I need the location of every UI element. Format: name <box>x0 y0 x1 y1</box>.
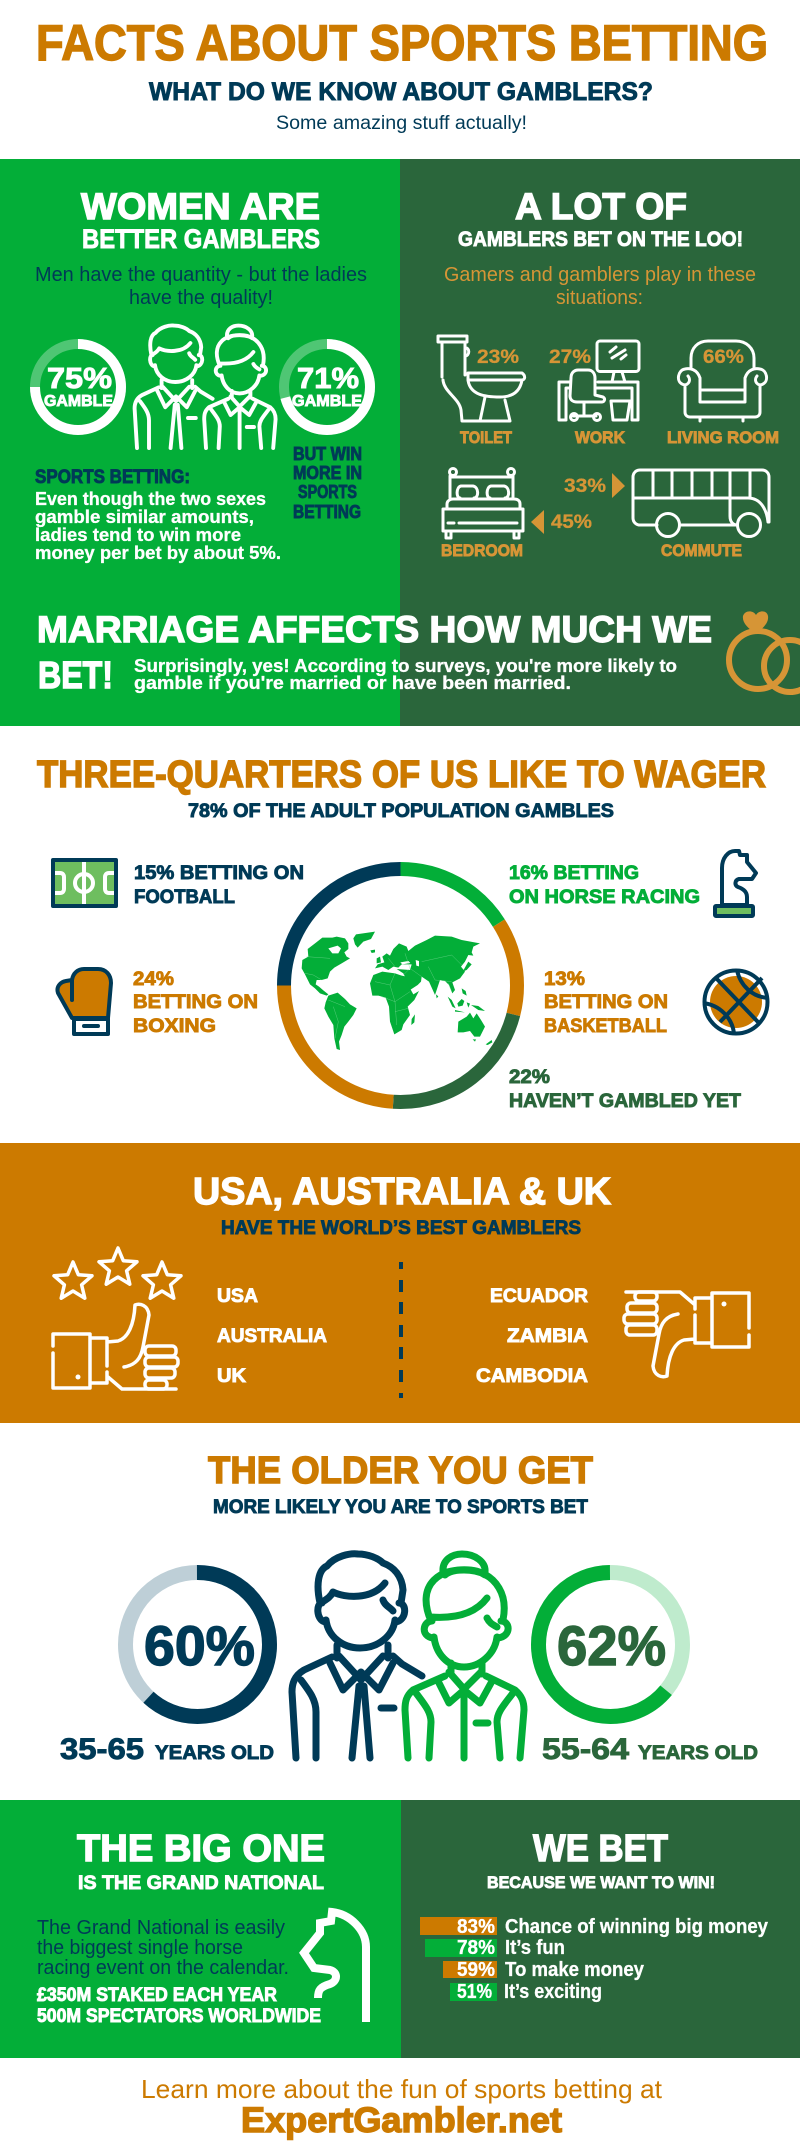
panel: the big one background <box>0 1800 401 2058</box>
icon: bed <box>443 468 523 538</box>
stat: basketball: BETTING ON <box>544 991 668 1013</box>
stat: basketball: BASKETBALL <box>544 1015 667 1037</box>
text: men quantity ladies quality: Men have the quantity - but the ladies <box>35 264 367 286</box>
stat: football: FOOTBALL <box>134 886 235 908</box>
text: grand national description: the biggest single horse <box>37 1937 243 1959</box>
label: 23%: 23% <box>477 347 519 368</box>
bar: 78% it's fun: It’s fun <box>505 1937 565 1959</box>
text: sports betting explanation: money per bet by about 5%. <box>35 543 281 563</box>
icon: chess knight <box>715 851 756 916</box>
stats: grand national figures <box>37 1985 321 2027</box>
label: commute: COMMUTE <box>661 541 742 560</box>
heading: the older you get: MORE LIKELY YOU ARE TO SPORTS BET <box>213 1496 588 1518</box>
stat: haven't gambled yet <box>509 1066 741 1112</box>
stat: horse racing: ON HORSE RACING <box>509 886 700 908</box>
footer: ExpertGambler.net <box>241 2101 562 2140</box>
icon: woman <box>405 1554 524 1758</box>
stat: basketball <box>544 968 768 1037</box>
footer: Learn more about the fun of sports betting at <box>141 2074 663 2104</box>
heading: the big one <box>77 1828 325 1894</box>
stat: basketball: 13% <box>544 968 585 990</box>
bar: 59% to make money: 59% <box>457 1959 495 1981</box>
heading: marriage affects how much we bet: BET! <box>38 655 113 697</box>
heading: three-quarters of us like to wager: 78% OF THE ADULT POPULATION GAMBLES <box>188 800 614 822</box>
panel: usa australia uk background <box>0 1143 800 1423</box>
label: bedroom: BEDROOM <box>441 541 523 560</box>
icon: work desk <box>559 341 639 420</box>
callout: but win more in sports betting: BUT WIN <box>293 444 362 464</box>
callout: but win more in sports betting: BETTING <box>293 502 361 522</box>
heading: usa australia uk <box>193 1171 612 1239</box>
stats: grand national figures: £350M STAKED EACH YEAR <box>37 1985 277 2006</box>
stat: horse racing: 16% BETTING <box>509 862 639 884</box>
icon: toilet <box>438 336 525 421</box>
heading: a lot of gamblers bet on the loo: A LOT OF <box>515 186 687 227</box>
chart: 71% gamble ring: GAMBLE <box>292 393 362 410</box>
panel: gamblers bet on the loo background <box>400 159 800 726</box>
stat: boxing <box>57 968 258 1037</box>
stat: haven't gambled yet: HAVEN’T GAMBLED YET <box>509 1090 741 1112</box>
heading: women are better gamblers: WOMEN ARE <box>81 186 320 227</box>
stat: boxing: BOXING <box>133 1015 216 1037</box>
label: 66%: 66% <box>703 347 744 368</box>
icon: bus <box>633 470 769 536</box>
list: worst gamblers <box>476 1285 588 1387</box>
bar: 78% it's fun: 78% <box>457 1937 495 1959</box>
label: 35-65 years old: 35-65 <box>60 1733 144 1766</box>
stat: boxing: BETTING ON <box>133 991 258 1013</box>
chart: 75% gamble ring: 75% <box>47 363 112 395</box>
callout: but win more in sports betting: MORE IN <box>293 463 362 483</box>
heading: the big one: IS THE GRAND NATIONAL <box>78 1872 324 1894</box>
text: men quantity ladies quality <box>35 264 367 309</box>
text: sports betting explanation <box>35 467 281 563</box>
list: best gamblers <box>217 1285 327 1387</box>
heading: we bet <box>487 1828 715 1892</box>
header <box>36 15 768 134</box>
heading: three-quarters of us like to wager <box>37 754 766 822</box>
bar: 83% chance of winning big money: Chance of winning big money <box>505 1916 769 1938</box>
chart: 62% ring <box>538 1572 682 1716</box>
heading: usa australia uk: USA, AUSTRALIA & UK <box>193 1171 612 1213</box>
bar: 59% to make money <box>443 1959 645 1981</box>
bar: 51% it's exciting: 51% <box>457 1981 492 2003</box>
label: 55-64 years old: 55-64 <box>542 1733 629 1766</box>
text: gamers and gamblers <box>444 264 756 309</box>
icon: football pitch <box>53 860 116 906</box>
callout: but win more in sports betting <box>293 444 362 522</box>
arrow: commute 33%: 33% <box>564 476 606 497</box>
heading: we bet: BECAUSE WE WANT TO WIN! <box>487 1873 715 1892</box>
text: sports betting explanation: SPORTS BETTING: <box>35 467 190 488</box>
icon: three stars <box>54 1248 181 1298</box>
text: men quantity ladies quality: have the quality! <box>129 287 273 309</box>
text: sports betting explanation: ladies tend to win more <box>35 525 241 545</box>
label: toilet: TOILET <box>460 428 513 447</box>
label: 35-65 years old: YEARS OLD <box>155 1742 274 1764</box>
tagline: Some amazing stuff actually! <box>276 113 527 134</box>
stat: horse racing <box>509 851 756 916</box>
chart: 60% ring: 60% <box>144 1614 255 1677</box>
heading: women are better gamblers <box>81 186 320 254</box>
stat: haven't gambled yet: 22% <box>509 1066 550 1088</box>
heading: marriage affects how much we bet <box>37 609 712 697</box>
panel: we bet background <box>401 1800 800 2058</box>
heading: we bet: WE BET <box>533 1828 668 1870</box>
icon: man <box>292 1554 422 1758</box>
text: sports betting explanation: Even though the two sexes <box>35 489 266 509</box>
list: worst gamblers: ZAMBIA <box>507 1325 588 1347</box>
heading: marriage affects how much we bet: MARRIAGE AFFECTS HOW MUCH WE <box>37 609 712 650</box>
bar: 51% it's exciting <box>450 1981 602 2003</box>
stat: football: 15% BETTING ON <box>134 862 304 884</box>
chart: 71% gamble ring: 71% <box>297 363 359 395</box>
heading: the big one: THE BIG ONE <box>77 1828 325 1870</box>
label: 35-65 years old <box>60 1733 274 1766</box>
panel: women are better gamblers background <box>0 159 400 726</box>
text: gamers and gamblers: situations: <box>556 287 643 309</box>
bar: 59% to make money: To make money <box>505 1959 645 1981</box>
chart: 62% ring: 62% <box>557 1614 666 1677</box>
label: work: WORK <box>575 428 626 447</box>
bar: 83% chance of winning big money: 83% <box>457 1916 495 1938</box>
arrow: bedroom 45%: 45% <box>551 512 592 533</box>
icon: boxing glove <box>57 969 111 1034</box>
chart: 75% gamble ring <box>35 344 121 430</box>
bar: 51% it's exciting: It’s exciting <box>504 1981 602 2003</box>
bar: 78% it's fun <box>425 1937 565 1959</box>
text: gamers and gamblers: Gamers and gamblers play in these <box>444 264 756 286</box>
heading: a lot of gamblers bet on the loo <box>458 186 743 251</box>
heading: women are better gamblers: BETTER GAMBLERS <box>82 224 320 254</box>
heading: the older you get <box>208 1450 593 1518</box>
list: best gamblers: UK <box>217 1365 246 1387</box>
chart: 60% ring <box>126 1572 270 1716</box>
list: worst gamblers: CAMBODIA <box>476 1365 588 1387</box>
heading: a lot of gamblers bet on the loo: GAMBLERS BET ON THE LOO! <box>458 228 743 251</box>
stats: grand national figures: 500M SPECTATORS WORLDWIDE <box>37 2006 321 2027</box>
arrow: bedroom 45% <box>531 510 592 534</box>
label: 55-64 years old <box>542 1733 758 1766</box>
icon: horse head <box>304 1912 366 2022</box>
chart: 75% gamble ring: GAMBLE <box>44 393 113 410</box>
text: grand national description <box>37 1917 289 1979</box>
list: worst gamblers: ECUADOR <box>490 1285 588 1307</box>
label: living room: LIVING ROOM <box>667 428 779 447</box>
list: best gamblers: USA <box>217 1285 258 1307</box>
heading: the older you get: THE OLDER YOU GET <box>208 1450 593 1492</box>
chart: gambling ring <box>284 869 517 1102</box>
icon: wedding rings <box>729 611 800 692</box>
heading: usa australia uk: HAVE THE WORLD’S BEST GAMBLERS <box>221 1217 581 1239</box>
icon: thumbs up <box>53 1304 178 1389</box>
icon: man and woman <box>135 325 276 448</box>
subtitle: WHAT DO WE KNOW ABOUT GAMBLERS? <box>149 78 653 106</box>
icon: armchair <box>678 341 767 421</box>
label: 55-64 years old: YEARS OLD <box>638 1742 758 1764</box>
text: marriage explanation: gamble if you're married or have been married. <box>134 673 571 693</box>
footer <box>141 2074 663 2140</box>
text: grand national description: racing event on the calendar. <box>37 1957 289 1979</box>
label: 27%: 27% <box>549 347 591 368</box>
text: sports betting explanation: gamble similar amounts, <box>35 507 254 527</box>
chart: world map <box>302 932 492 1050</box>
text: grand national description: The Grand National is easily <box>37 1917 285 1939</box>
stat: football <box>53 860 304 908</box>
list: best gamblers: AUSTRALIA <box>217 1325 327 1347</box>
icon: thumbs down <box>624 1292 749 1377</box>
stat: boxing: 24% <box>133 968 174 990</box>
text: marriage explanation: Surprisingly, yes! According to surveys, you're more likely to <box>134 656 677 676</box>
chart: 71% gamble ring <box>284 344 370 430</box>
arrow: commute 33% <box>564 473 625 498</box>
icon: basketball <box>703 970 768 1034</box>
callout: but win more in sports betting: SPORTS <box>298 482 357 502</box>
text: marriage explanation <box>134 656 677 693</box>
